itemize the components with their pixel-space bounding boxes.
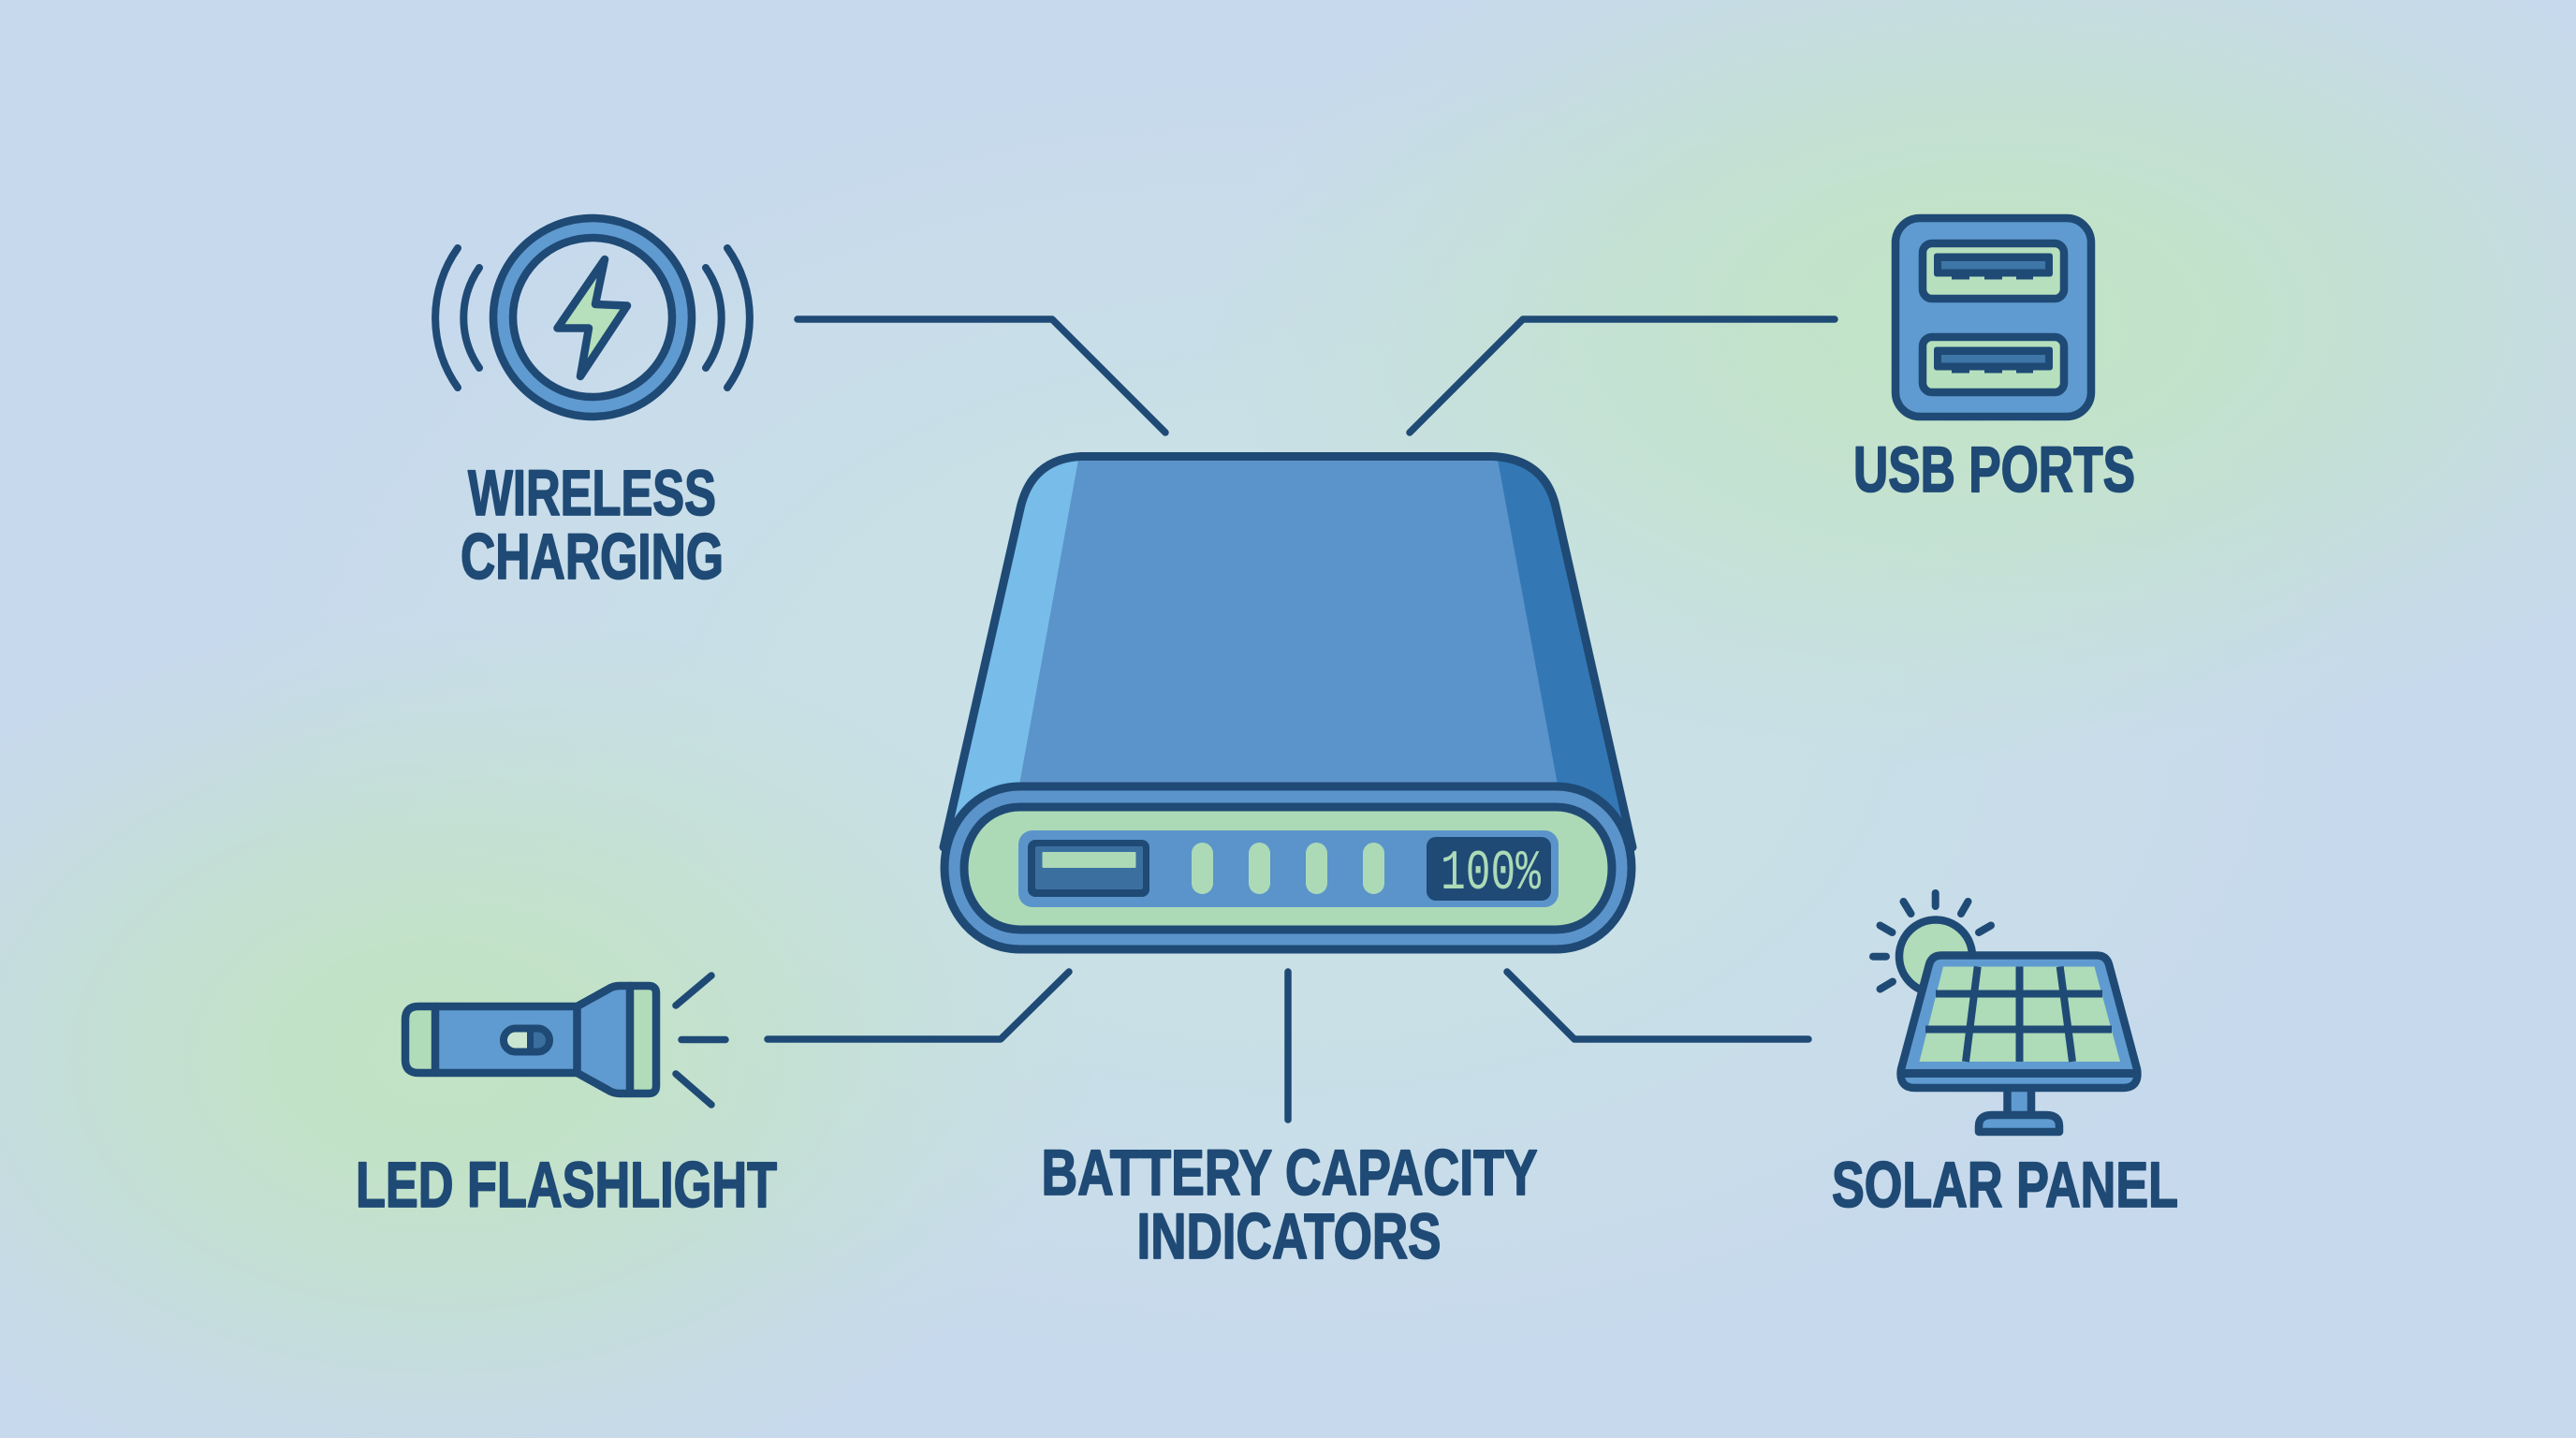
digital display: 100% bbox=[1441, 843, 1542, 906]
connector: battery capacity indicators bbox=[1284, 972, 1292, 1120]
label: battery capacity indicators: BATTERY CAPACITY bbox=[1041, 1137, 1537, 1209]
stand bbox=[2007, 1086, 2031, 1116]
icon: USB ports bbox=[1895, 218, 2091, 417]
flashlight outline bbox=[405, 986, 656, 1093]
left highlight side bbox=[953, 460, 1078, 822]
label: battery capacity indicators bbox=[1041, 1137, 1537, 1272]
power bank top surface bbox=[944, 457, 1632, 847]
label: solar panel: SOLAR PANEL bbox=[1832, 1149, 2178, 1221]
label: battery capacity indicators: INDICATORS bbox=[1136, 1200, 1442, 1272]
light beams bbox=[676, 976, 725, 1105]
panel frame bbox=[1901, 955, 2137, 1088]
icon: solar panel bbox=[1873, 893, 2137, 1132]
lower port bbox=[1923, 337, 2064, 392]
central power bank illustration bbox=[944, 457, 1632, 949]
connector: solar panel bbox=[1507, 972, 1808, 1039]
control strip bbox=[1018, 830, 1559, 907]
label: wireless charging: CHARGING bbox=[461, 521, 724, 593]
right shaded side bbox=[1498, 460, 1624, 822]
front face green inset bbox=[964, 807, 1612, 930]
icon: wireless charging bbox=[435, 218, 750, 417]
end cap and lens bbox=[405, 986, 656, 1093]
lightning bolt bbox=[558, 259, 627, 376]
connector: wireless charging bbox=[798, 319, 1165, 433]
panel cells bbox=[1919, 966, 2120, 1062]
connector: USB ports bbox=[1410, 319, 1835, 433]
upper port bbox=[1923, 243, 2064, 299]
sun bbox=[1899, 919, 1972, 992]
stand base bbox=[1979, 1115, 2059, 1132]
label: wireless charging: WIRELESS bbox=[468, 457, 716, 529]
switch bbox=[504, 1028, 550, 1052]
label: wireless charging bbox=[461, 457, 724, 593]
label: USB ports: USB PORTS bbox=[1853, 433, 2135, 506]
connector: LED flashlight bbox=[768, 972, 1069, 1039]
USB port on front bbox=[1028, 840, 1149, 897]
front face outer shell bbox=[944, 786, 1632, 949]
flashlight fill bbox=[405, 986, 656, 1093]
label: LED flashlight: LED FLASHLIGHT bbox=[356, 1149, 777, 1221]
panel grid bbox=[1903, 966, 2135, 1073]
sun rays bbox=[1873, 893, 1991, 989]
icon: LED flashlight bbox=[405, 976, 725, 1105]
wireless waves bbox=[435, 248, 750, 388]
battery level indicators bbox=[1192, 843, 1384, 894]
power bank body outline bbox=[944, 457, 1632, 847]
charging ring bbox=[504, 228, 681, 406]
digital display bbox=[1427, 837, 1551, 906]
